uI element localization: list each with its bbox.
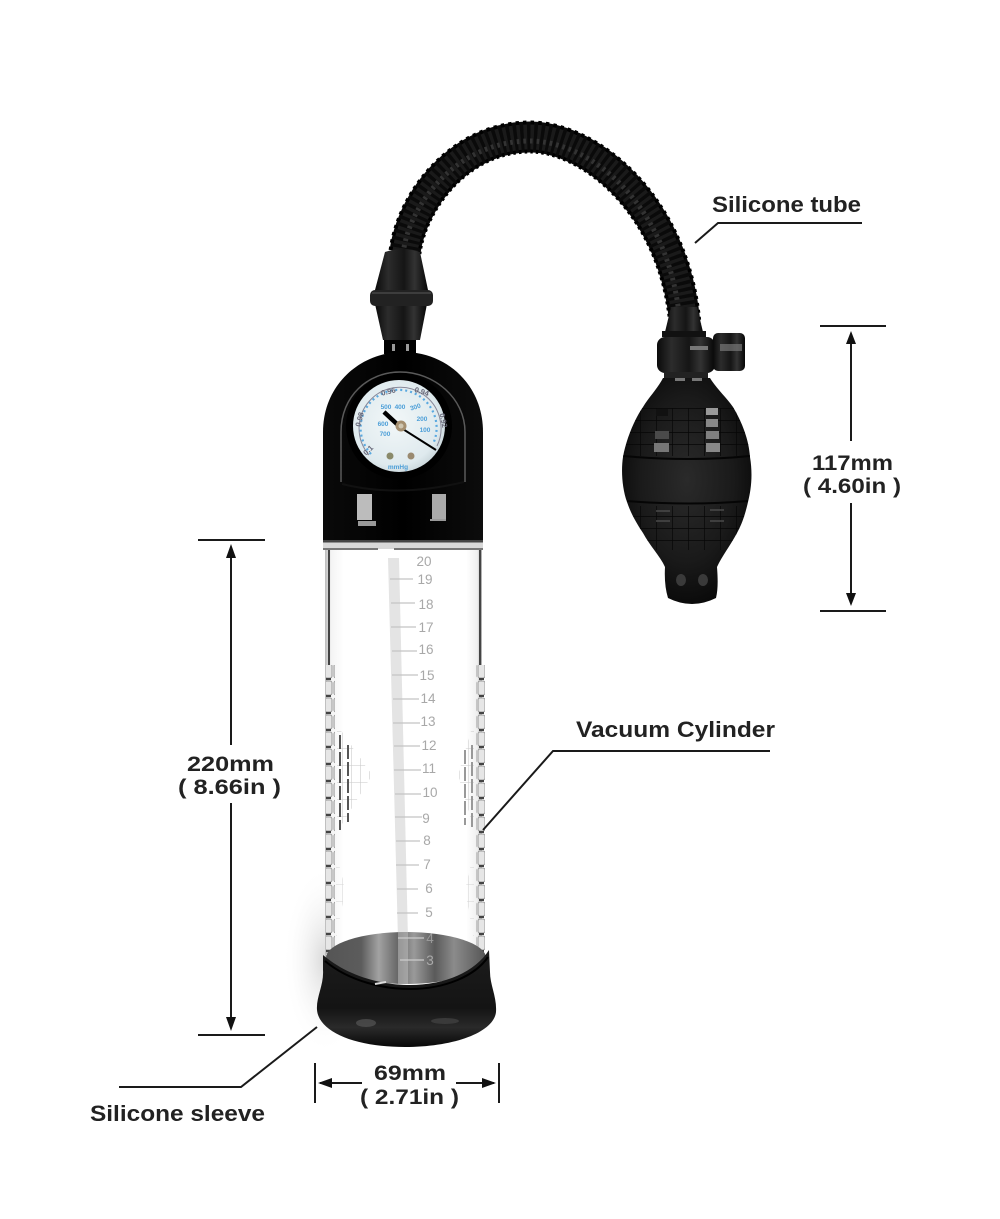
bulb body (622, 378, 751, 604)
callout: silicone tube: Silicone tube (712, 192, 861, 217)
dimension: base width 69mm: ( 2.71in ) (360, 1086, 459, 1109)
gauge scale text: 300 (409, 402, 422, 413)
hand bulb with valve (622, 331, 751, 604)
ruler numbers: 9 (422, 811, 430, 826)
callout: vacuum cylinder: Vacuum Cylinder (576, 717, 775, 742)
callout: silicone tube (695, 192, 862, 243)
ruler numbers: 17 (418, 620, 434, 635)
dimension: bulb height 117mm: 117mm (812, 452, 893, 475)
dimension: base width 69mm: 69mm (374, 1062, 446, 1085)
gauge scale text: 200 (417, 416, 428, 423)
ruler numbers: 12 (421, 738, 437, 753)
ruler numbers: 11 (422, 761, 436, 776)
ruler numbers (416, 554, 438, 920)
dimension: cylinder height 220mm: 220mm (187, 753, 274, 776)
rubber sleeve base (317, 931, 496, 1047)
rubber sleeve base: 4 (426, 931, 434, 946)
dimension: bulb height 117mm: ( 4.60in ) (803, 475, 901, 498)
background shadow near base (283, 865, 367, 1055)
gauge scale text: 700 (380, 431, 391, 438)
gauge scale text: 0.96 (380, 385, 397, 398)
ruler numbers: 19 (417, 572, 433, 587)
tube lower collar (665, 307, 703, 332)
cylinder glass (325, 541, 485, 961)
gauge scale text: mmHg (388, 464, 408, 471)
dimension: base width 69mm (315, 1062, 499, 1109)
callout: vacuum cylinder (483, 717, 775, 830)
gauge scale text (353, 385, 449, 471)
ruler numbers: 15 (419, 668, 435, 683)
dimension: bulb height 117mm (803, 326, 901, 611)
pump assembly (317, 137, 751, 1047)
ruler numbers: 20 (416, 554, 432, 569)
ruler scale (388, 554, 438, 940)
silicone tube (403, 137, 685, 325)
callout: silicone sleeve: Silicone sleeve (90, 1101, 265, 1126)
pressure gauge dial (346, 373, 452, 479)
ruler numbers: 13 (420, 714, 436, 729)
gauge scale text: 0.92 (438, 412, 449, 429)
ruler numbers: 18 (418, 597, 434, 612)
dimension: cylinder height 220mm: ( 8.66in ) (178, 776, 281, 799)
glass grip texture (326, 665, 485, 955)
gauge scale text: 0.94 (413, 385, 431, 398)
gauge scale text: 500 (381, 404, 392, 411)
ruler numbers: 7 (423, 857, 431, 872)
gauge scale text: 0.98 (353, 411, 366, 428)
gauge scale text: 600 (378, 421, 389, 428)
dimension: cylinder height 220mm (178, 540, 281, 1035)
infographic canvas (90, 120, 900, 1121)
ruler numbers: 14 (420, 691, 436, 706)
ruler numbers: 5 (425, 905, 433, 920)
tube connector cone (370, 249, 433, 354)
ruler numbers: 10 (422, 785, 438, 800)
ruler numbers: 8 (423, 833, 431, 848)
rubber sleeve base: 3 (426, 953, 434, 968)
valve (657, 331, 745, 378)
ruler numbers: 16 (418, 642, 434, 657)
gauge housing (323, 352, 483, 549)
bulb grip grid (623, 378, 750, 586)
ruler numbers: 6 (425, 881, 433, 896)
callout: silicone sleeve (90, 1027, 317, 1126)
gauge scale text: 400 (395, 404, 406, 411)
gauge scale text: 0.1 (361, 443, 375, 457)
gauge scale text: 100 (420, 427, 431, 434)
